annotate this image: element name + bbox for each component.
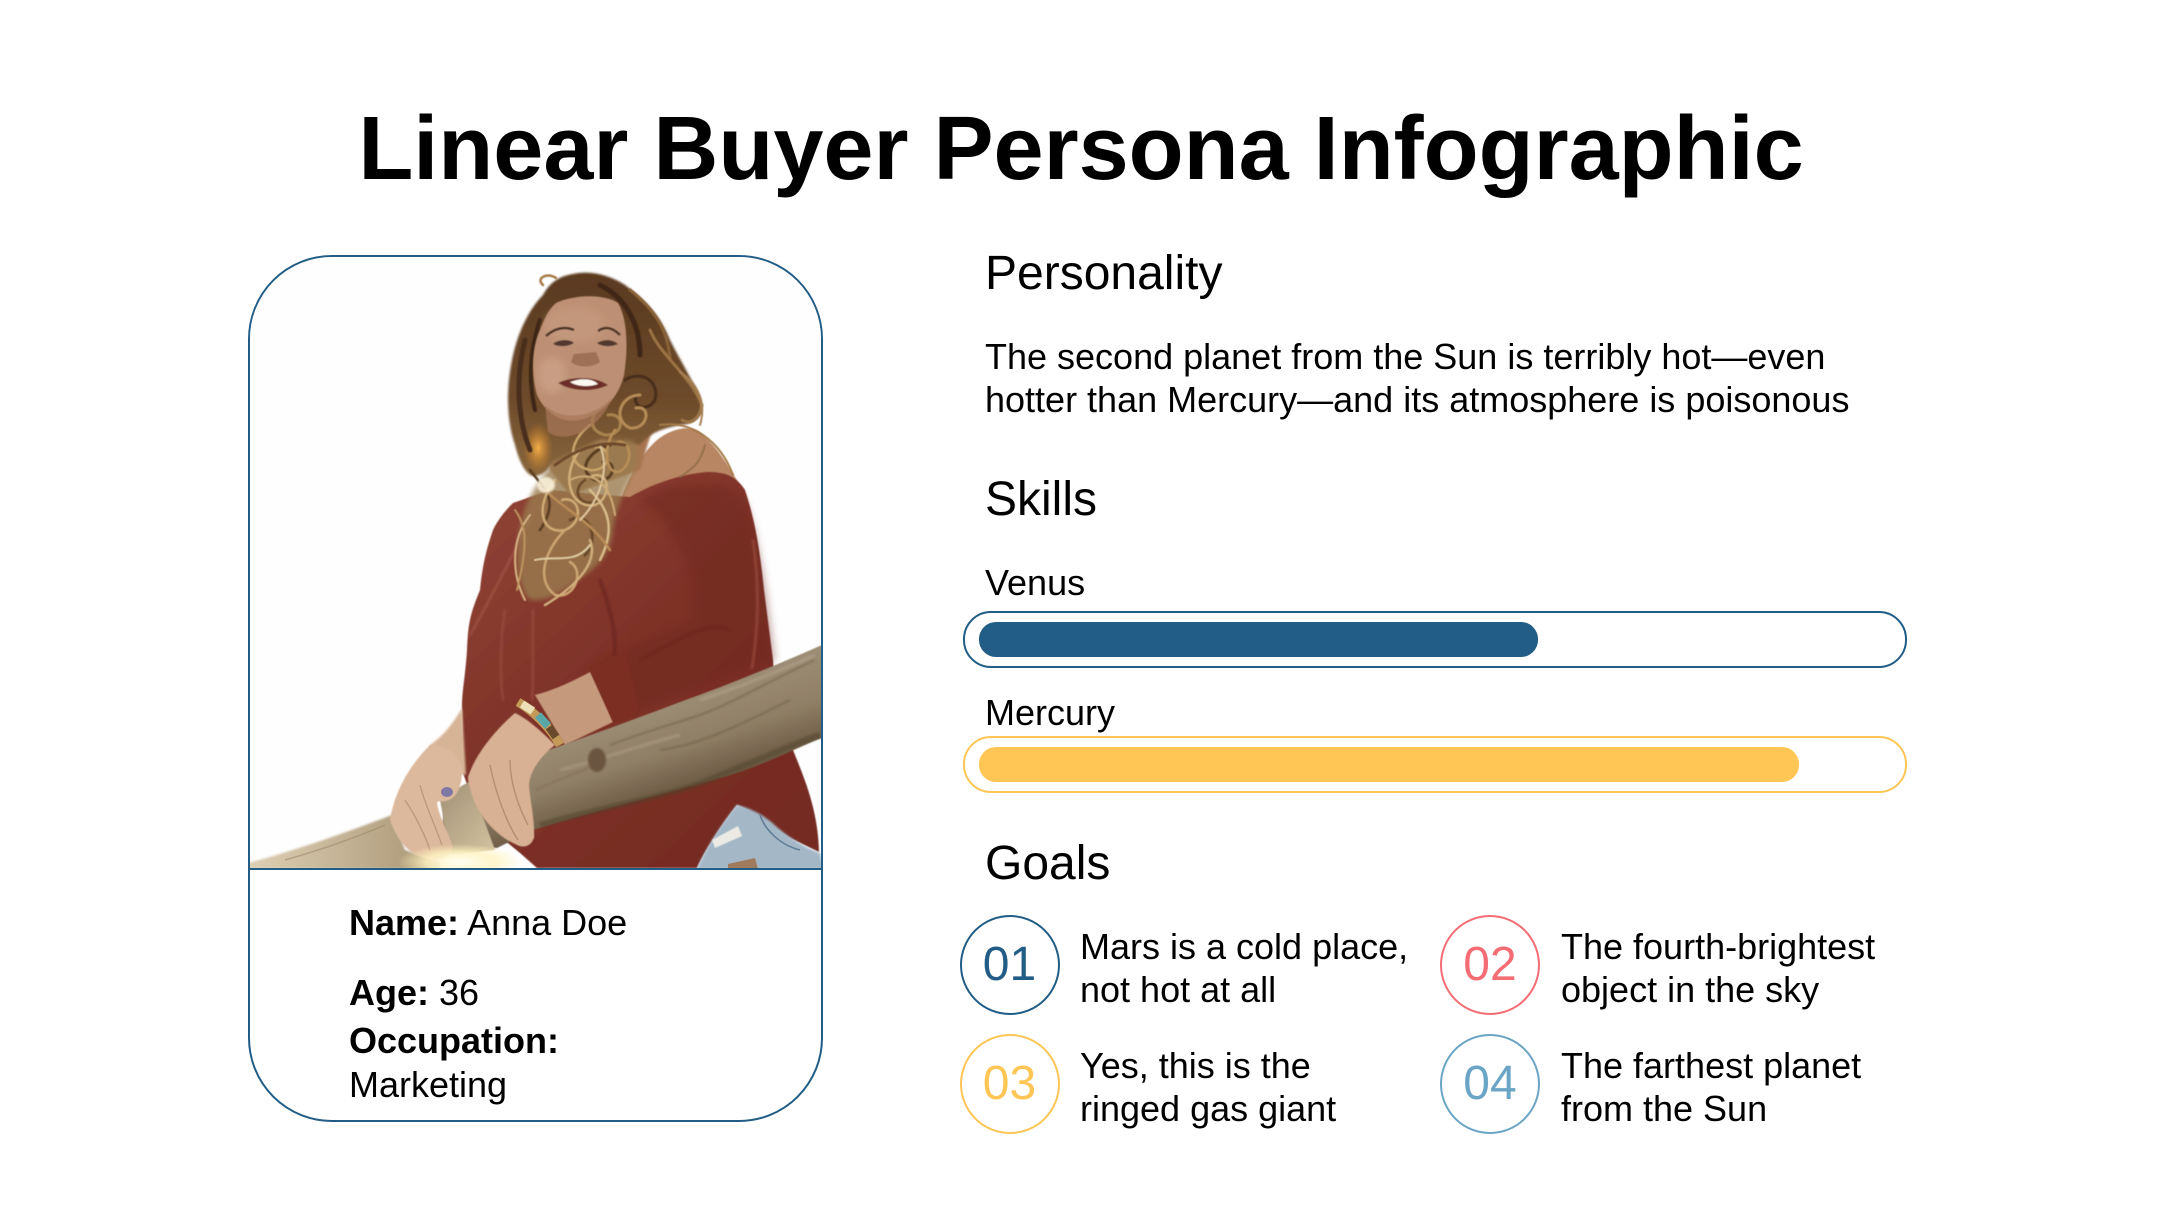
personality text: The second planet from the Sun is terribly hot—even [985,336,1825,377]
goal number 02 [1440,915,1540,1015]
occupation: Occupation: [349,1020,559,1060]
jeans tear [728,858,758,868]
goal text 04 [1561,1044,1861,1128]
goal text 01 [1080,926,1408,1010]
photo divider [250,868,820,870]
goal number 01: 01 [983,938,1036,991]
jeans seam [760,814,800,850]
jeans fray [712,826,742,848]
skill label: Venus: Venus [985,562,1085,603]
right finger lines [490,760,528,840]
goal number 02: 02 [1463,938,1517,991]
jeans [696,804,822,868]
forearm [534,672,612,744]
hair mass upper [508,272,701,476]
hair lit orange [522,422,552,474]
log knot [588,748,606,772]
goal number 04 [1440,1034,1540,1134]
right hand [468,712,554,846]
goal number 03: 03 [983,1057,1036,1110]
goal text 03: Yes, this is the [1080,1044,1311,1086]
name: Name: Anna Doe [349,902,627,943]
skill bar: Venus [962,610,1906,668]
log grain [534,654,820,824]
title: Linear Buyer Persona Infographic [358,99,1804,199]
heading: personality: Personality [985,247,1222,300]
heading: goals: Goals [985,836,1110,890]
left finger lines [404,784,442,850]
log grain left [284,824,384,860]
portrait photo [250,257,821,868]
heading: skills: Skills [985,472,1097,526]
shirt folds [470,520,757,700]
shirt shading [590,483,774,720]
sun glow [398,844,522,880]
goal text 02: The fourth-brightest [1561,926,1875,966]
shoulder skin [610,428,738,530]
goal number 03 [960,1034,1060,1134]
goal text 04: from the Sun [1561,1088,1767,1128]
personality text [985,336,1849,420]
goal text 01: not hot at all [1080,968,1276,1010]
goal text 04: The farthest planet [1561,1044,1861,1086]
thumb nail [440,786,452,796]
left hand [390,744,462,859]
hair glow highlight [536,476,554,492]
age: Age: 36 [349,972,479,1013]
goal text 03 [1080,1044,1336,1128]
goal text 01: Mars is a cold place, [1080,926,1408,966]
sleeve cuff [590,650,640,722]
goal number 01 [960,915,1060,1015]
hair mass lower [517,440,638,600]
log right section [440,644,822,848]
neck [544,390,654,494]
bracelet [518,702,560,744]
left arm [430,708,466,774]
skill fill: Mercury [979,747,1799,782]
goal text 03: ringed gas giant [1080,1088,1336,1128]
goal number 04: 04 [1463,1057,1517,1110]
log left [248,814,440,868]
occupation value: Marketing [349,1064,507,1104]
skill label: Mercury: Mercury [985,692,1115,733]
log between hands [440,782,494,854]
goal text 02: object in the sky [1561,968,1819,1010]
hair curls [514,275,732,604]
face [533,296,626,436]
shirt [462,472,818,868]
goal text 02 [1561,926,1875,1010]
persona card [248,254,822,1122]
skill fill: Venus [979,622,1538,657]
skill bar: Mercury [962,736,1906,792]
personality text: hotter than Mercury—and its atmosphere is poisonous [985,379,1849,420]
